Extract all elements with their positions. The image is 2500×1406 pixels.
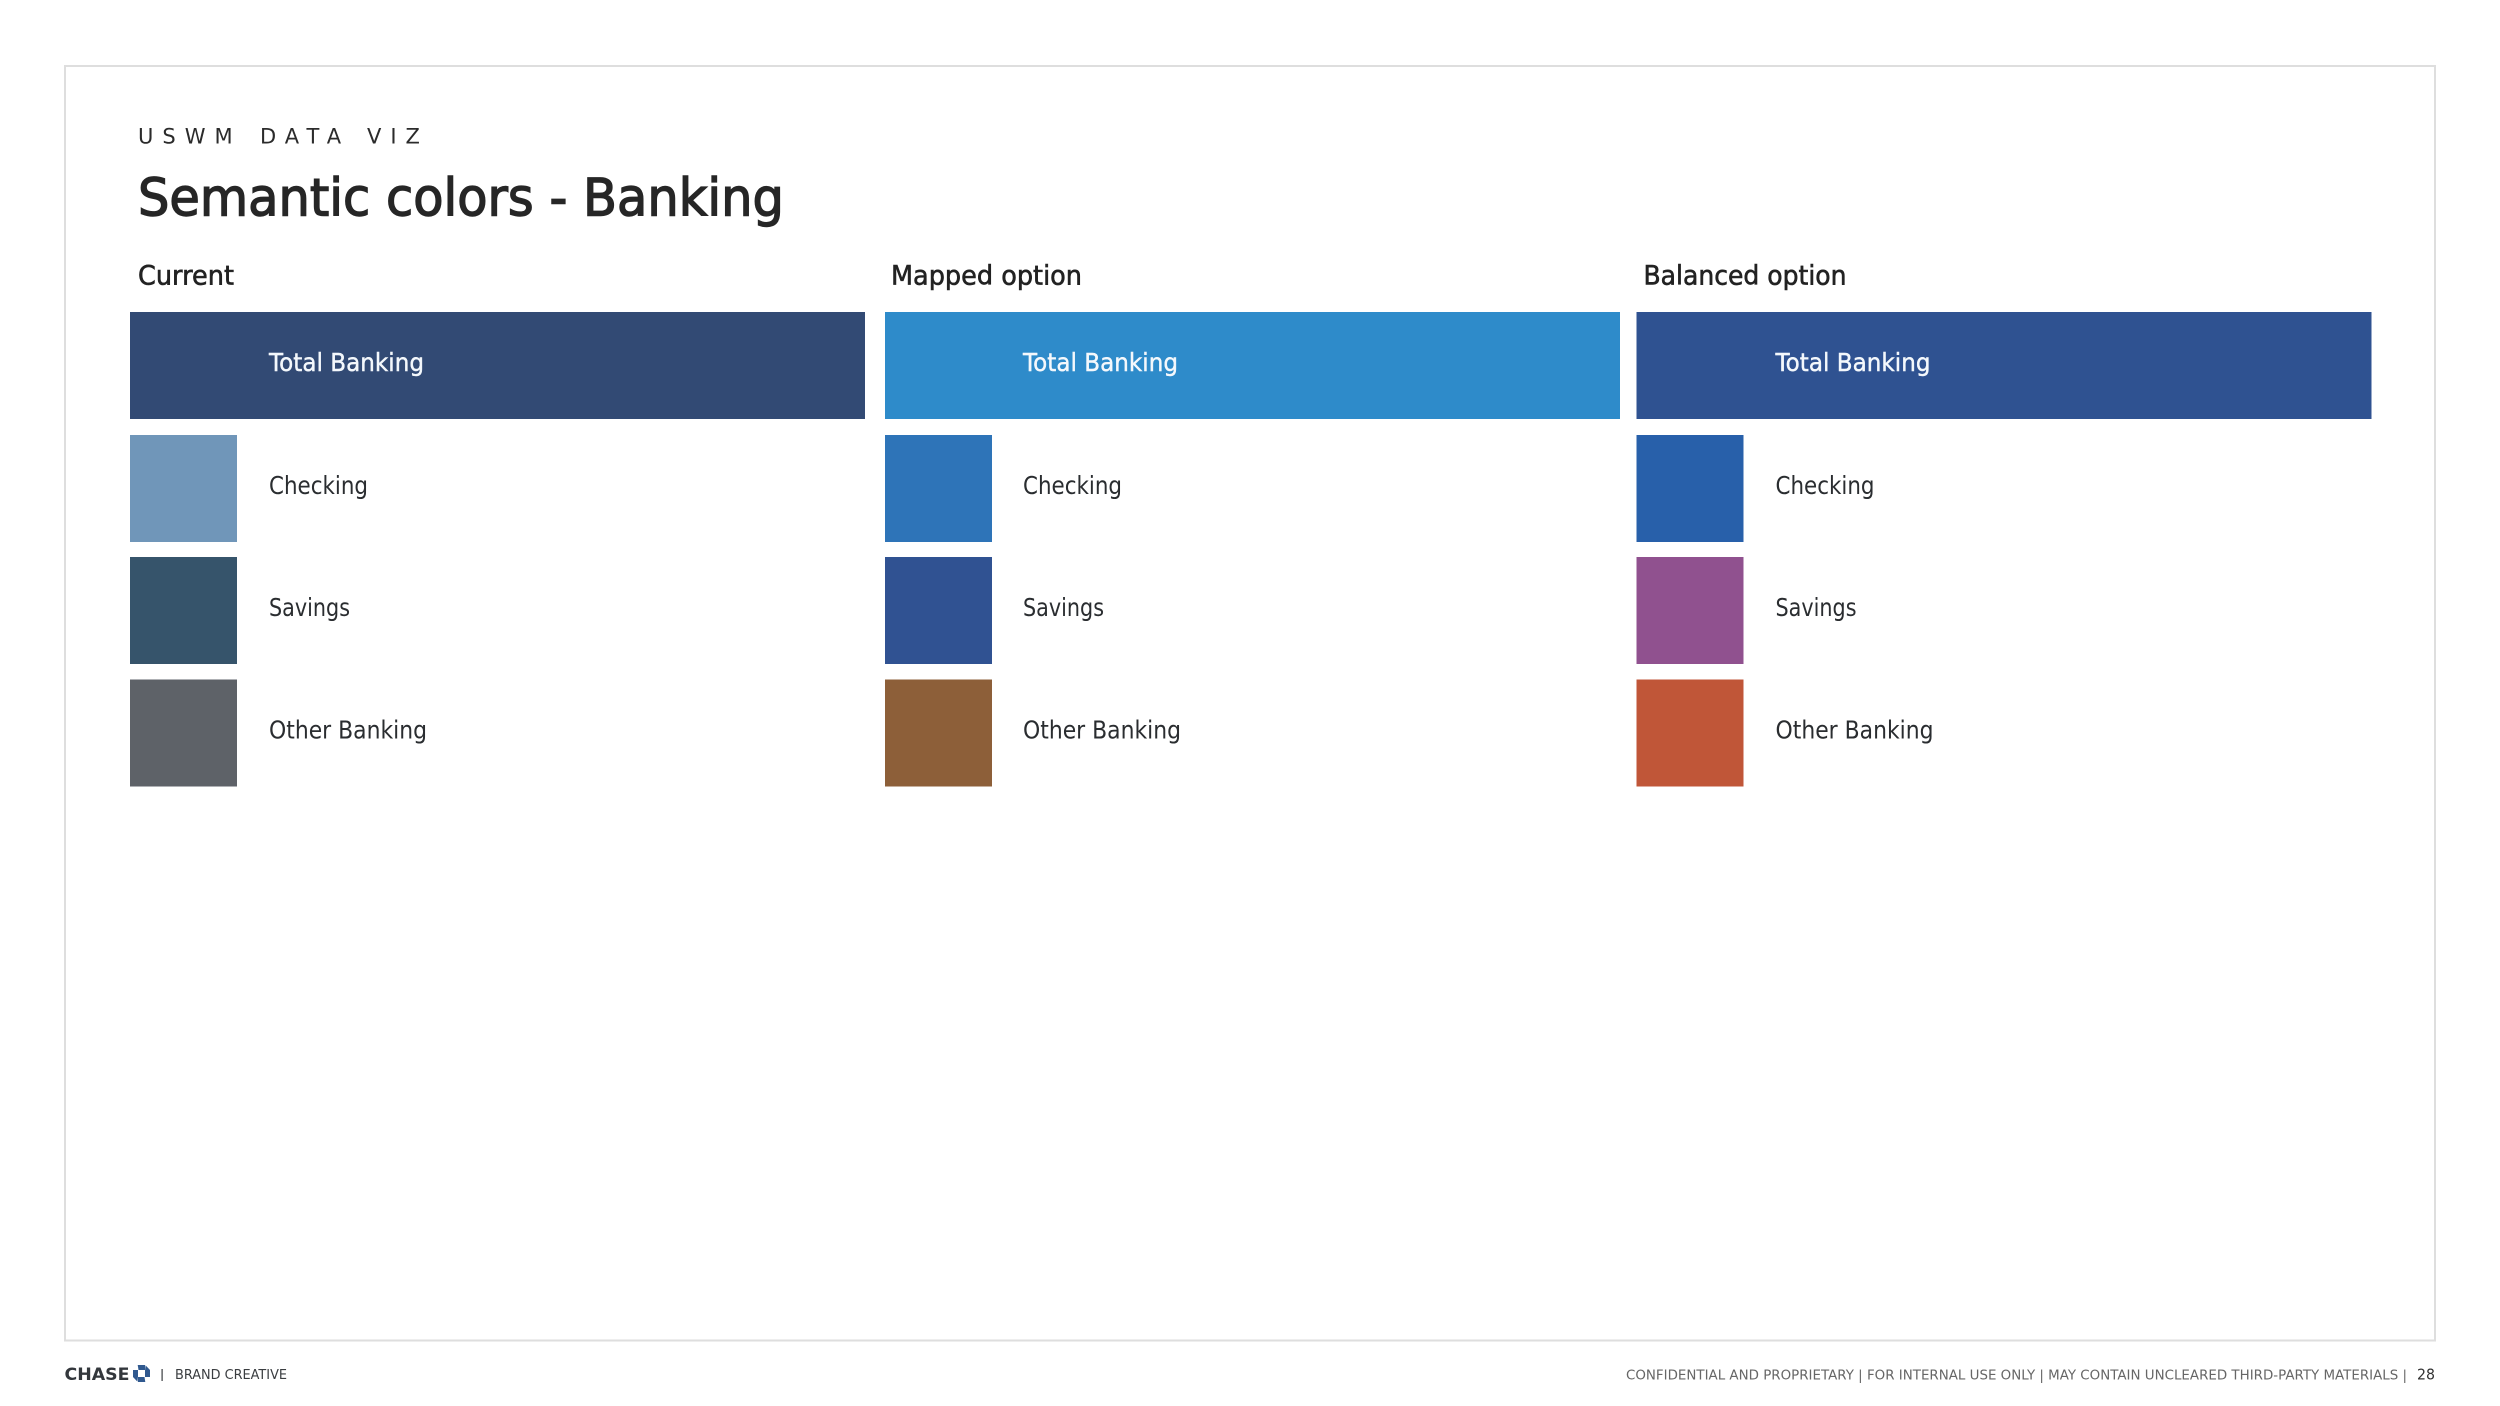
icon: Chase octagon [133, 1365, 150, 1382]
page number: 28 [2417, 1366, 2435, 1384]
row: Total Banking: Total Banking [1775, 348, 1930, 377]
footer: confidentiality note: CONFIDENTIAL AND PROPRIETARY | FOR INTERNAL USE ONLY | MAY CONTAIN UNCLEARED THIRD-PARTY MATERIALS | [1626, 1368, 2407, 1384]
heading: Current: Current [138, 260, 234, 292]
row: Savings: Savings [1023, 593, 1104, 622]
row: Savings [130, 557, 350, 664]
row: Other Banking: Other Banking [1776, 716, 1934, 744]
row: Other Banking [1636, 680, 1934, 786]
separator [162, 1369, 163, 1381]
title: Semantic colors - Banking [138, 168, 784, 228]
heading: Mapped option: Mapped option [891, 260, 1082, 292]
heading: Balanced option: Balanced option [1644, 260, 1846, 292]
eyebrow: VIZ [367, 124, 429, 148]
row: Savings [1636, 557, 1856, 664]
row: Savings [885, 557, 1104, 664]
row: Savings: Savings [269, 593, 350, 622]
wordmark: CHASE [64, 1365, 130, 1384]
row: Total Banking [1636, 312, 2372, 419]
row: Other Banking [885, 680, 1181, 786]
row: Total Banking [885, 312, 1620, 419]
row: Checking [885, 435, 1122, 542]
row: Checking: Checking [1023, 471, 1122, 500]
row: Other Banking [130, 680, 427, 786]
row: Other Banking: Other Banking [269, 716, 427, 744]
column: Balanced option [1636, 260, 2372, 786]
row: Other Banking: Other Banking [1023, 716, 1181, 744]
row: Total Banking: Total Banking [1022, 348, 1178, 377]
eyebrow: DATA [260, 124, 350, 148]
row: Savings: Savings [1776, 593, 1856, 622]
column: Mapped option [885, 260, 1620, 786]
eyebrow: USWM [138, 124, 242, 148]
row: Checking: Checking [1776, 471, 1874, 500]
row: Checking [130, 435, 368, 542]
label: Brand Creative: BRAND CREATIVE [175, 1367, 287, 1383]
row: Checking [1636, 435, 1874, 542]
footer: brand [64, 1365, 287, 1384]
row: Total Banking: Total Banking [268, 348, 424, 377]
row: Checking: Checking [269, 471, 368, 500]
row: Total Banking [130, 312, 865, 419]
column: Current [130, 260, 865, 786]
